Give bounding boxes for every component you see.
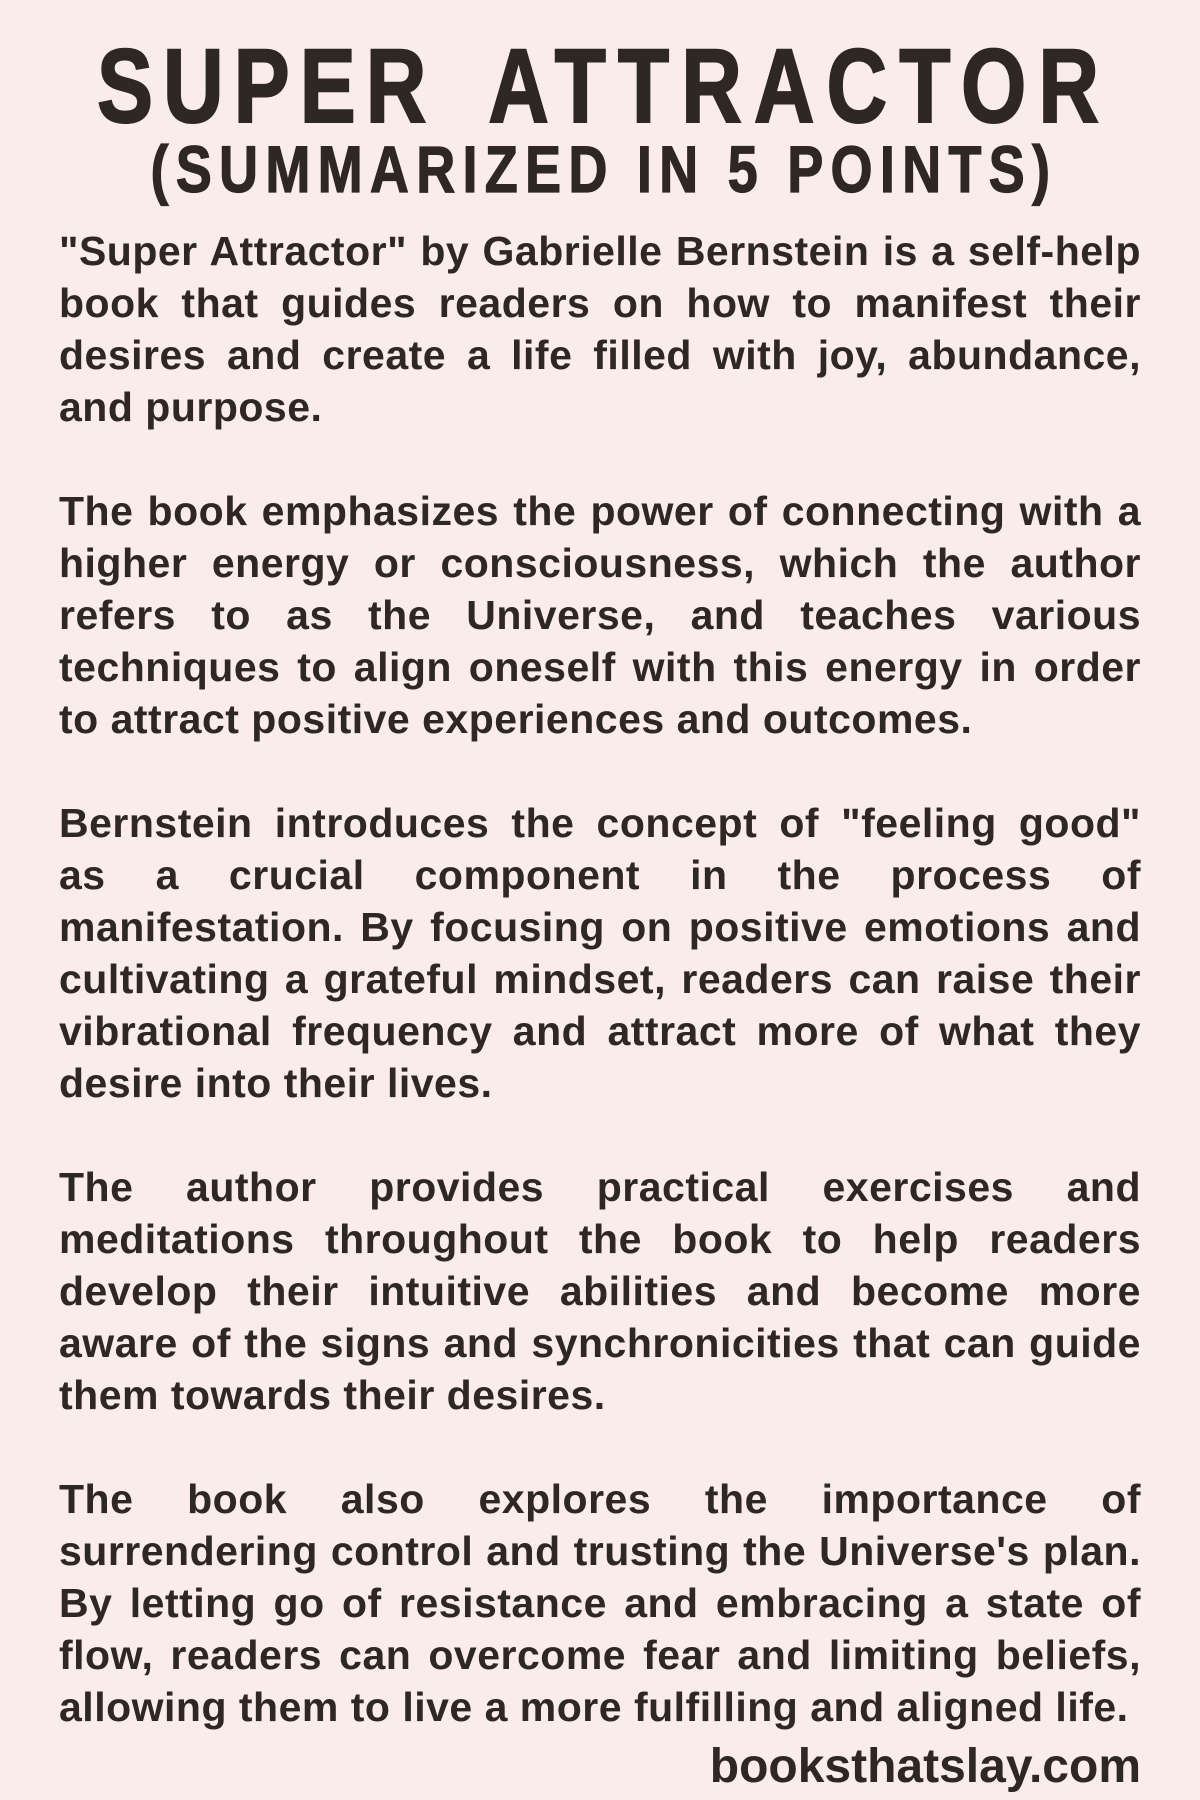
text block: connecting with higher energy paragraph: higher energy or consciousness, which the author xyxy=(59,540,1141,586)
text block: introduction paragraph: and purpose. xyxy=(59,384,322,430)
text block: practical exercises paragraph: them towards their desires. xyxy=(59,1372,606,1418)
text block: feeling good paragraph: as a crucial component in the process of xyxy=(59,852,1141,898)
text block: connecting with higher energy paragraph: The book emphasizes the power of connecting with a xyxy=(59,488,1141,534)
text block: feeling good paragraph: manifestation. By focusing on positive emotions and xyxy=(59,904,1141,950)
title: ATTRACTOR xyxy=(488,28,1111,145)
footer: website: booksthatslay.com xyxy=(710,1740,1141,1793)
text block: introduction paragraph: "Super Attractor" by Gabrielle Bernstein is a self-help xyxy=(59,228,1141,274)
text block: practical exercises paragraph: aware of the signs and synchronicities that can guide xyxy=(59,1320,1141,1366)
text block: surrendering control paragraph: surrendering control and trusting the Universe's plan. xyxy=(59,1528,1141,1574)
text block: feeling good paragraph: desire into their lives. xyxy=(59,1060,493,1106)
text block: practical exercises paragraph: develop their intuitive abilities and become more xyxy=(59,1268,1141,1314)
text block: connecting with higher energy paragraph xyxy=(59,488,1141,742)
title xyxy=(97,28,1111,145)
text block: feeling good paragraph: vibrational frequency and attract more of what they xyxy=(59,1008,1141,1054)
text block: practical exercises paragraph xyxy=(59,1164,1141,1418)
text block: introduction paragraph: book that guides readers on how to manifest their xyxy=(59,280,1141,326)
text block: feeling good paragraph: Bernstein introduces the concept of "feeling good" xyxy=(59,800,1141,846)
title: SUPER xyxy=(97,28,436,145)
text block: feeling good paragraph: cultivating a grateful mindset, readers can raise their xyxy=(59,956,1141,1002)
text block: practical exercises paragraph: meditations throughout the book to help readers xyxy=(59,1216,1141,1262)
text block: practical exercises paragraph: The author provides practical exercises and xyxy=(59,1164,1141,1210)
text block: connecting with higher energy paragraph: techniques to align oneself with this energy in order xyxy=(59,644,1141,690)
text block: surrendering control paragraph: The book also explores the importance of xyxy=(59,1476,1141,1522)
text block: surrendering control paragraph: By letting go of resistance and embracing a state of xyxy=(59,1580,1141,1626)
text block: introduction paragraph: desires and create a life filled with joy, abundance, xyxy=(59,332,1141,378)
subtitle: (SUMMARIZED IN 5 POINTS) xyxy=(150,132,1057,206)
text block: feeling good paragraph xyxy=(59,800,1141,1106)
text block: surrendering control paragraph: flow, readers can overcome fear and limiting beliefs, xyxy=(59,1632,1141,1678)
text block: surrendering control paragraph xyxy=(59,1476,1141,1730)
text block: introduction paragraph xyxy=(59,228,1141,430)
text block: connecting with higher energy paragraph: to attract positive experiences and outcomes. xyxy=(59,696,972,742)
text block: connecting with higher energy paragraph: refers to as the Universe, and teaches various xyxy=(59,592,1141,638)
text block: surrendering control paragraph: allowing them to live a more fulfilling and aligned life. xyxy=(59,1684,1129,1730)
